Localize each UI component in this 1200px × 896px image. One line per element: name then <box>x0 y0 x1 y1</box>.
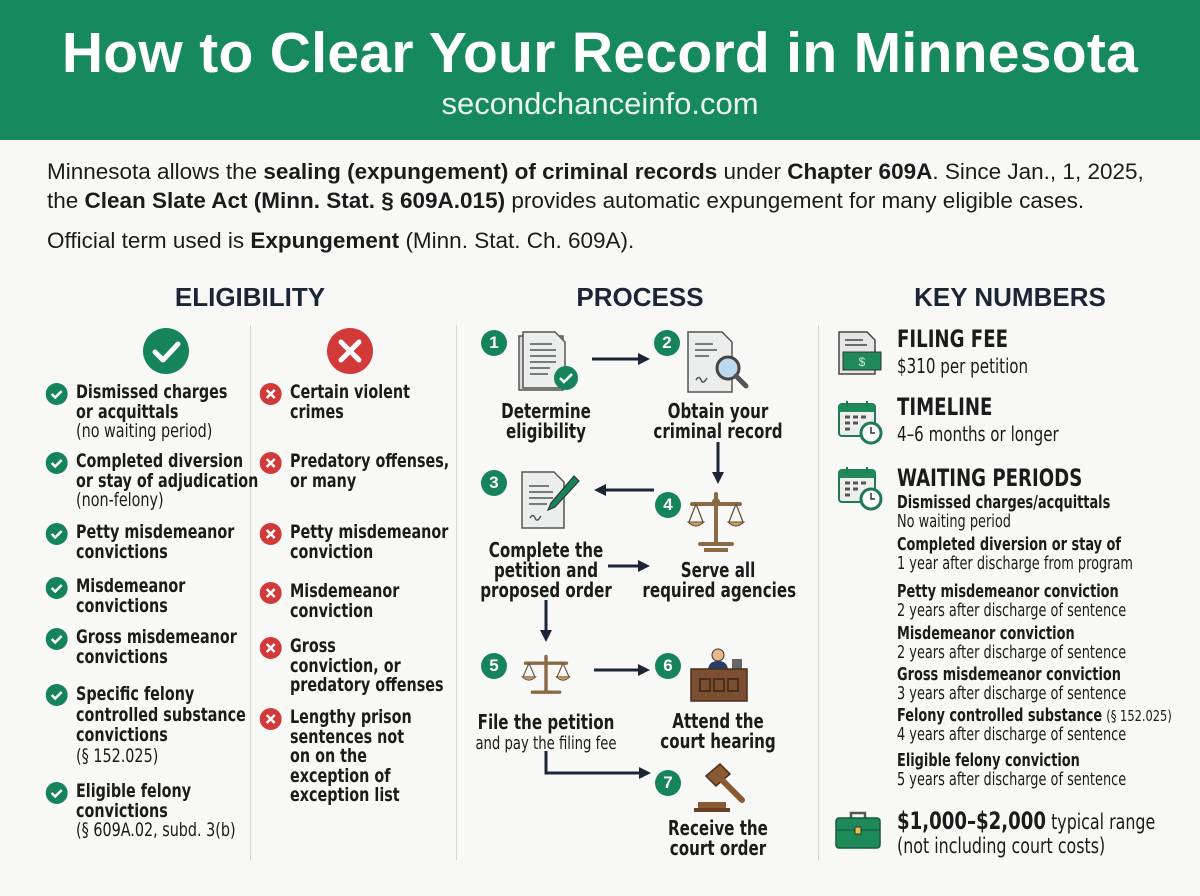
not eligible item 4: conviction <box>290 600 373 622</box>
intro text: Minnesota allows the sealing (expungement) of criminal records under Chapter 609A. Since Jan., 1, 2025, <box>47 159 1144 184</box>
eligible item 3: convictions <box>76 540 168 562</box>
eligible item 6: convictions <box>76 724 168 746</box>
filing fee: FILING FEE <box>897 325 1008 353</box>
filing fee: $310 per petition <box>897 354 1028 378</box>
not eligible item 2 <box>260 450 449 492</box>
heading: process: PROCESS <box>576 282 704 312</box>
label: serve agencies: Serve all <box>681 558 755 582</box>
header banner <box>0 0 1200 140</box>
eligible item 3 <box>46 521 234 562</box>
eligible item 2 <box>46 450 258 511</box>
not eligible item 3: Petty misdemeanor <box>290 521 448 543</box>
icon: scales <box>686 492 746 552</box>
eligible item 2: (non-felony) <box>76 489 164 511</box>
waiting period list: 4 years after discharge of sentence <box>897 724 1126 744</box>
step 4 <box>655 492 746 552</box>
waiting period list: Misdemeanor conviction <box>897 624 1075 644</box>
cost range: $1,000–$2,000 typical range <box>897 807 1155 835</box>
arrow 1 to 2 <box>592 353 650 365</box>
panel: not eligible <box>327 328 373 374</box>
step 4: 4 <box>663 495 673 514</box>
eligible item 5: Gross misdemeanor <box>76 626 237 648</box>
timeline: 4–6 months or longer <box>897 422 1059 446</box>
panel: eligible <box>143 328 189 374</box>
icon: scales <box>521 654 571 694</box>
eligible item 1: (no waiting period) <box>76 420 212 442</box>
label: obtain record: Obtain your <box>668 399 768 423</box>
not eligible item 6: on on the <box>290 745 367 767</box>
heading: key numbers: KEY NUMBERS <box>914 282 1106 312</box>
eligible item 1: Dismissed charges <box>76 381 227 403</box>
icon: document with pen <box>521 471 580 529</box>
label: determine eligibility: Determine <box>501 399 591 423</box>
eligible item 7 <box>46 780 236 841</box>
icon: calendar clock <box>837 399 883 445</box>
icon: big check <box>143 328 189 374</box>
label: receive order: Receive the <box>668 816 768 840</box>
step 1: 1 <box>489 333 499 352</box>
icon: big cross <box>327 328 373 374</box>
cost range: (not including court costs) <box>897 834 1105 858</box>
eligible item 5: convictions <box>76 646 168 668</box>
arrow 3 to 4 <box>608 560 650 572</box>
step 7 <box>650 762 818 822</box>
waiting period list: Completed diversion or stay of <box>897 535 1121 555</box>
step 2: 2 <box>662 333 672 352</box>
label: obtain record: criminal record <box>653 419 783 443</box>
panel: process flow <box>475 330 796 860</box>
eligible item 7: (§ 609A.02, subd. 3(b) <box>76 819 236 841</box>
eligible item 6: (§ 152.025) <box>76 744 158 766</box>
not eligible item 1: crimes <box>290 400 344 422</box>
step 3: 3 <box>489 473 499 492</box>
label: determine eligibility: eligibility <box>506 419 586 443</box>
icon: fee document with money <box>837 330 883 376</box>
not eligible item 6: exception of <box>290 764 391 786</box>
eligible item 1 <box>46 381 227 442</box>
label: file the petition: File the petition <box>478 710 614 734</box>
icon: calendar clock 2 <box>837 465 883 511</box>
cost range <box>897 809 1155 858</box>
waiting period list: Felony controlled substance (§ 152.025) <box>897 706 1172 726</box>
not eligible item 6: sentences not <box>290 726 404 748</box>
not eligible item 6 <box>260 706 412 806</box>
arrow 3 to 5 <box>540 600 552 642</box>
not eligible item 6: Lengthy prison <box>290 706 412 728</box>
step 2 <box>654 330 748 393</box>
timeline: TIMELINE <box>897 393 992 421</box>
label: complete the petition <box>480 538 612 602</box>
eligible item 6: controlled substance <box>76 704 246 726</box>
not eligible item 4: Misdemeanor <box>290 580 399 602</box>
eligible item 6: Specific felony <box>76 683 194 705</box>
icon: gavel <box>692 762 748 814</box>
not eligible item 5: Gross <box>290 635 336 657</box>
step 5 <box>481 653 571 694</box>
icon: fee document with money: $ <box>859 355 866 369</box>
label: complete the petition: Complete the <box>489 538 603 562</box>
not eligible item 4 <box>260 580 400 622</box>
waiting period list: 5 years after discharge of sentence <box>897 770 1126 790</box>
waiting period list <box>897 494 1197 794</box>
not eligible item 3: conviction <box>290 540 373 562</box>
eligible item 3: Petty misdemeanor <box>76 521 234 543</box>
arrow 5 to 6 <box>594 664 650 676</box>
intro text: the Clean Slate Act (Minn. Stat. § 609A.015) provides automatic expungement for many eligible cases. <box>47 188 1084 213</box>
arrow 2 to 4 <box>712 442 724 484</box>
waiting period list: No waiting period <box>897 512 1011 532</box>
step 5: 5 <box>489 656 499 675</box>
label: attend hearing <box>642 711 794 751</box>
icon: judge bench <box>690 647 748 703</box>
waiting period list: Dismissed charges/acquittals <box>897 493 1110 513</box>
not eligible item 5: predatory offenses <box>290 674 444 696</box>
not eligible item 5: conviction, or <box>290 654 401 676</box>
waiting period list: 3 years after discharge of sentence <box>897 684 1126 704</box>
label: obtain record <box>653 399 783 443</box>
icon: document with magnifier <box>687 331 748 393</box>
label: serve agencies <box>642 558 796 602</box>
eligible item 4 <box>46 575 186 616</box>
waiting periods heading: WAITING PERIODS <box>897 464 1082 492</box>
not eligible item 2: or many <box>290 470 356 492</box>
step 1 <box>481 330 578 391</box>
not eligible item 2: Predatory offenses, <box>290 450 449 472</box>
icon: document with check <box>518 331 578 391</box>
eligible item 2: or stay of adjudication <box>76 470 258 492</box>
eligible item 5 <box>46 626 237 668</box>
heading: eligibility: ELIGIBILITY <box>175 282 325 312</box>
subtitle: secondchanceinfo.com <box>441 86 759 121</box>
label: attend hearing: Attend the <box>672 709 764 733</box>
label: determine eligibility <box>501 399 591 443</box>
eligible item 1: or acquittals <box>76 400 178 422</box>
eligible item 4: Misdemeanor <box>76 575 185 597</box>
not eligible item 1 <box>260 381 410 422</box>
elbow arrow 5 to 7 <box>539 751 655 781</box>
eligible item 2: Completed diversion <box>76 450 243 472</box>
waiting period list: Gross misdemeanor conviction <box>897 665 1121 685</box>
filing fee <box>897 327 1028 380</box>
eligible item 6 <box>46 683 246 766</box>
timeline <box>897 395 1059 448</box>
step 3 <box>481 470 580 529</box>
label: receive order: court order <box>670 836 766 860</box>
intro text <box>47 159 1144 213</box>
step 6: 6 <box>663 656 673 675</box>
eligible item 7: Eligible felony <box>76 780 191 802</box>
official term note: Official term used is Expungement (Minn. Stat. Ch. 609A). <box>47 228 634 253</box>
title: How to Clear Your Record in Minnesota <box>62 21 1138 85</box>
panel: key numbers <box>820 325 1200 860</box>
not eligible item 6: exception list <box>290 784 400 806</box>
eligible item 7: convictions <box>76 800 168 822</box>
label: serve agencies: required agencies <box>642 578 796 602</box>
label: file the petition <box>470 712 622 754</box>
step 6 <box>650 645 818 710</box>
waiting period list: 1 year after discharge from program <box>897 554 1133 574</box>
dividers <box>250 325 251 860</box>
not eligible item 5 <box>260 635 444 696</box>
arrow 4 to 3 <box>594 484 654 496</box>
waiting period list: Petty misdemeanor conviction <box>897 582 1119 602</box>
label: receive order <box>642 818 794 858</box>
eligible item 4: convictions <box>76 594 168 616</box>
waiting period list: Eligible felony conviction <box>897 751 1080 771</box>
label: attend hearing: court hearing <box>660 729 776 753</box>
label: complete the petition: proposed order <box>480 578 612 602</box>
not eligible item 3 <box>260 521 448 562</box>
not eligible item 1: Certain violent <box>290 381 410 403</box>
waiting period list: 2 years after discharge of sentence <box>897 600 1126 620</box>
step 7: 7 <box>663 773 673 792</box>
label: file the petition: and pay the filing fee <box>475 734 617 754</box>
icon: briefcase <box>835 810 881 850</box>
label: complete the petition: petition and <box>494 558 598 582</box>
waiting period list: 2 years after discharge of sentence <box>897 642 1126 662</box>
